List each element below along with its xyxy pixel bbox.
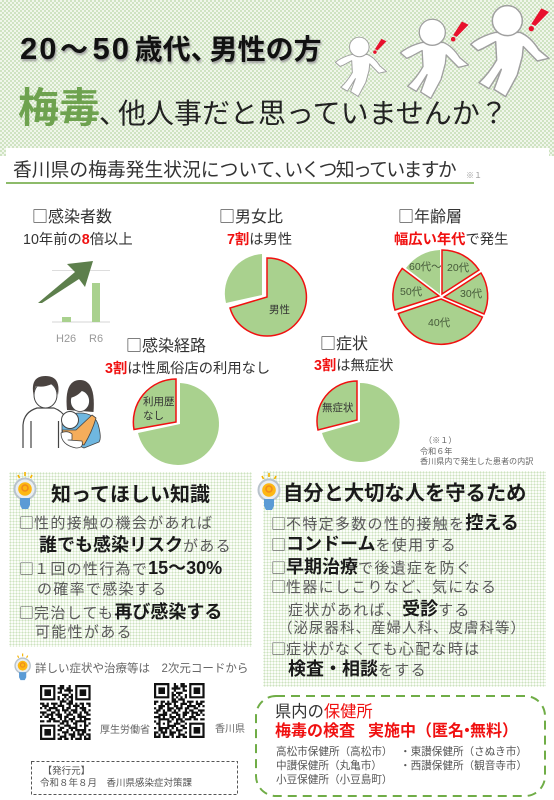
footnote: 令和６年 [420,446,452,456]
pie chart: symptoms: 無症状 [322,401,354,414]
item 1: □不特定多数の性的接触を控える [271,513,519,534]
item 5 line 2: 検査・相談をする [288,659,427,679]
protection list [271,513,526,679]
title line two accent: 梅毒 [18,85,100,131]
item 3 line 2: 可能性がある [35,624,133,641]
bar: H26 [62,317,71,322]
section underline [6,182,474,184]
title line two: 、他人事だと思っていませんか？ [99,98,508,129]
publisher text: 令和８年８月 香川県感染症対策課 [40,778,192,789]
icon: family illustration [23,376,100,448]
item 2: □コンドームを使用する [271,534,457,555]
section heading background [6,148,549,184]
label: infected count: □感染者数 [32,203,112,227]
icon: lightbulb protection [258,473,280,510]
item 4 line 3: （泌尿器科、産婦人科、皮膚科等） [278,621,526,637]
label: infection route: □感染経路 [126,332,206,356]
clinic: Shodo: 小豆保健所（小豆島町） [276,774,393,786]
pie chart: infection route [133,379,219,465]
stat: symptoms: 3割は無症状 [314,358,393,374]
clinic: Seisan: ・西讃保健所（観音寺市） [400,760,527,772]
item 3 line 1: □完治しても再び感染する [19,602,222,623]
pie chart: age groups: 60代～ [409,261,442,273]
stat: age group: 幅広い年代で発生 [394,232,508,248]
header background [0,0,554,156]
label: gender ratio: □男女比 [219,203,283,227]
pie chart: age groups: 40代 [428,317,451,329]
pie chart: age groups: 30代 [460,288,483,300]
clinic list [276,746,527,786]
heading: protection: 自分と大切な人を守るため [283,483,526,505]
panel: knowledge background [9,472,252,647]
QR label: ministry: 厚生労働省 [100,725,150,736]
pie chart: symptoms [317,381,400,462]
footnote: 香川県内で発生した患者の内訳 [420,457,533,466]
clinic: Chusan: 中讃保健所（丸亀市） [276,760,382,772]
publisher text: 【発行元】 [43,766,90,777]
pie chart: infection route: なし [143,410,164,422]
item 4 line 2: 症状があれば、受診する [288,599,471,619]
item 1 line 1: □性的接触の機会があれば [19,512,213,533]
icon: lightbulb small [15,653,30,680]
item 5 line 1: □症状がなくても心配な時は [271,638,480,659]
pie chart: gender ratio: 男性 [269,303,290,316]
clinic heading: 県内の保健所 [275,703,373,721]
publisher box frame [32,762,238,794]
bar: R6 [92,283,100,322]
pie chart: gender ratio [225,254,306,336]
item 3: □早期治療で後遺症を防ぐ [271,557,472,578]
item 4 line 1: □性器にしこりなど、気になる [271,576,497,597]
label: symptoms: □症状 [320,330,368,354]
title line one: 20～50歳代、男性の方 [20,31,322,66]
QR code: prefecture [154,684,205,737]
heading: knowledge: 知ってほしい知識 [51,484,210,506]
icon: large surprised figure [471,6,549,97]
bar chart: infected count [38,261,110,345]
item 2 line 2: の確率で感染する [37,581,167,598]
icon: lightbulb knowledge [14,472,36,509]
bar chart: infected count: H26 [56,333,76,345]
item 1 line 2: 誰でも感染リスクがある [39,535,232,555]
QR label: prefecture: 香川県 [215,724,245,735]
bar chart: infected count: R6 [89,333,103,345]
footnote: （※１） [428,436,456,445]
stat: gender ratio: 7割は男性 [227,232,292,248]
publisher text [40,766,192,789]
clinic test announcement: 梅毒の検査 実施中（匿名・無料） [275,723,518,740]
footnote mark: ※１ [466,171,482,180]
panel: protection background [263,471,546,687]
QR code: ministry [40,686,91,739]
pie chart: infection route: 利用歴 [143,396,175,408]
icon: medium surprised figure [400,19,469,98]
section heading: 香川県の梅毒発生状況について、いくつ知っていますか [13,159,455,180]
knowledge list [19,512,232,641]
mother and baby [61,380,100,448]
item 2 line 1: □１回の性行為で15～30% [19,558,222,579]
pie chart: age groups: 50代 [400,286,423,298]
stat: infection route: 3割は性風俗店の利用なし [105,361,270,377]
clinic box frame [256,696,545,796]
icon: small surprised figure [335,37,386,96]
label: age group: □年齢層 [398,203,462,227]
footnote [420,436,533,466]
clinic: Tosan: ・東讃保健所（さぬき市） [400,746,527,758]
pie chart: age groups [393,250,488,344]
QR caption: 詳しい症状や治療等は 2次元コードから [35,663,248,675]
stat: infected count: 10年前の8倍以上 [23,232,133,248]
arrow: rising trend [38,261,93,303]
pie chart: age groups: 20代 [447,262,470,274]
father [23,376,66,448]
clinic: Takamatsu: 高松市保健所（高松市） [276,746,393,758]
